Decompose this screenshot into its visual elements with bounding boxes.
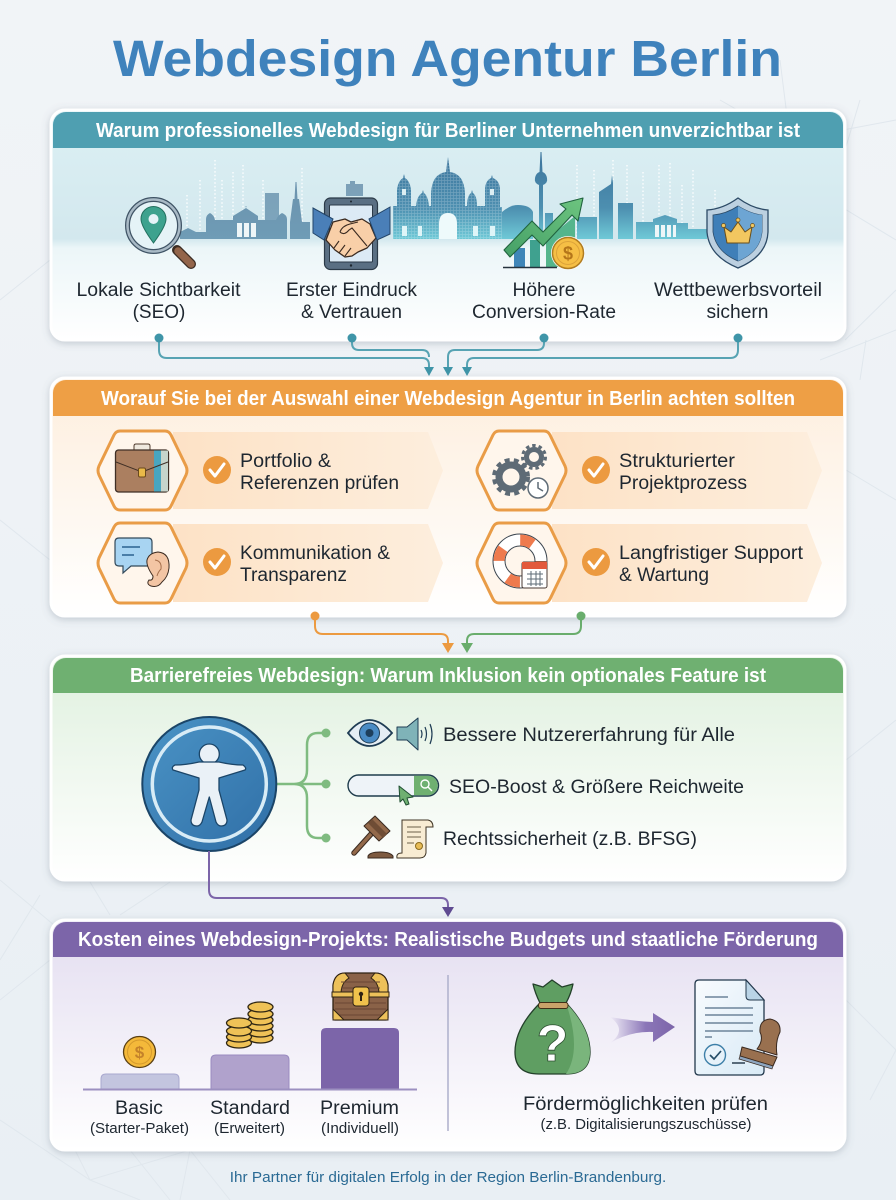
panel: barrierefreies Webdesign (51, 656, 845, 880)
item: Kommunikation: Kommunikation & (240, 543, 390, 564)
heading bar: warum: Warum professionelles Webdesign für Berliner Unternehmen unverzichtbar ist (96, 120, 800, 142)
label: Basic: Basic (115, 1098, 163, 1119)
heading bar: Kosten (53, 922, 843, 957)
label: höhere Conversion-Rate: Conversion-Rate (472, 302, 616, 323)
label: Fördermöglichkeiten: Fördermöglichkeiten prüfen (523, 1094, 768, 1115)
arrow: orange connector (310, 612, 454, 653)
panel: Auswahl einer Agentur (51, 378, 845, 616)
arrow: funding (610, 1013, 675, 1043)
icon: treasure chest (332, 973, 389, 1020)
item: Projektprozess (477, 431, 822, 510)
arrow: green connector (461, 612, 586, 653)
label: lokale Sichtbarkeit: Lokale Sichtbarkeit (76, 280, 241, 301)
icon: search bar with cursor (348, 775, 438, 805)
heading bar: worauf (53, 380, 843, 416)
label: Standard: (Erweitert) (214, 1121, 285, 1137)
heading bar: barrierefrei (53, 658, 843, 693)
heading bar: Kosten: Kosten eines Webdesign-Projekts: Realistische Budgets und staatliche Förderung (78, 929, 818, 951)
label: erster Eindruck: & Vertrauen (301, 302, 402, 323)
branches from accessibility icon (275, 728, 330, 842)
label: Premium: (Individuell) (321, 1121, 399, 1137)
icon: magnifier with location pin (128, 200, 191, 264)
icon: document with stamp (695, 980, 780, 1075)
item: Support: & Wartung (619, 565, 709, 586)
item: Support (477, 523, 822, 603)
arrow: purple connector (209, 851, 454, 917)
icon: handshake on tablet (313, 198, 390, 270)
item: Projektprozess: Projektprozess (619, 473, 747, 494)
item: Projektprozess: Strukturierter (619, 451, 736, 472)
heading bar: worauf: Worauf Sie bei der Auswahl einer Webdesign Agentur in Berlin achten sollten (101, 388, 795, 410)
panel: Kosten (51, 920, 845, 1150)
icon: coin: $ (135, 1043, 145, 1062)
label: Standard: Standard (210, 1098, 290, 1119)
text: SEO-Boost: SEO-Boost & Größere Reichweite (449, 777, 744, 798)
arrows: panel one to panel two (154, 334, 742, 376)
label: Wettbewerbsvorteil: Wettbewerbsvorteil (654, 280, 822, 301)
icon: growth chart with coin (503, 198, 585, 270)
item: Kommunikation (98, 523, 443, 603)
icon: eye and speaker (348, 718, 432, 750)
icon: money bag with question mark: ? (537, 1015, 568, 1073)
label: lokale Sichtbarkeit: (SEO) (133, 302, 185, 323)
icon: shield with crown (707, 198, 768, 268)
heading bar: barrierefrei: Barrierefreies Webdesign: Warum Inklusion kein optionales Feature ist (130, 665, 766, 687)
text: bessere Nutzererfahrung: Bessere Nutzererfahrung für Alle (443, 725, 735, 746)
icon: money bag with question mark (515, 980, 590, 1074)
footer: Ihr Partner für digitalen Erfolg in der Region Berlin-Brandenburg. (230, 1170, 666, 1186)
Berlin skyline (180, 152, 715, 239)
label: Fördermöglichkeiten: (z.B. Digitalisierungszuschüsse) (540, 1117, 752, 1133)
panel: warum professionelles Webdesign (51, 110, 845, 340)
item: Support: Langfristiger Support (619, 543, 804, 564)
icon: coin stacks (226, 1002, 273, 1048)
icon: growth chart with coin: $ (563, 244, 573, 264)
label: Basic: (Starter-Paket) (90, 1121, 189, 1137)
heading bar: warum (53, 112, 843, 148)
label: höhere Conversion-Rate: Höhere (512, 280, 576, 301)
icon: coin (124, 1036, 156, 1068)
price bar chart (83, 1028, 417, 1090)
icon: gavel and scroll (354, 816, 433, 858)
item: Kommunikation: Transparenz (240, 565, 347, 586)
label: Premium: Premium (320, 1098, 399, 1119)
title: Webdesign Agentur Berlin (113, 30, 782, 87)
label: Wettbewerbsvorteil: sichern (706, 302, 768, 323)
item: Portfolio (98, 431, 443, 510)
item: Portfolio: Portfolio & (240, 451, 331, 472)
label: erster Eindruck: Erster Eindruck (286, 280, 418, 301)
icon: accessibility person (142, 717, 276, 851)
item: Portfolio: Referenzen prüfen (240, 473, 399, 494)
text: Rechtssicherheit: Rechtssicherheit (z.B. BFSG) (443, 829, 697, 850)
